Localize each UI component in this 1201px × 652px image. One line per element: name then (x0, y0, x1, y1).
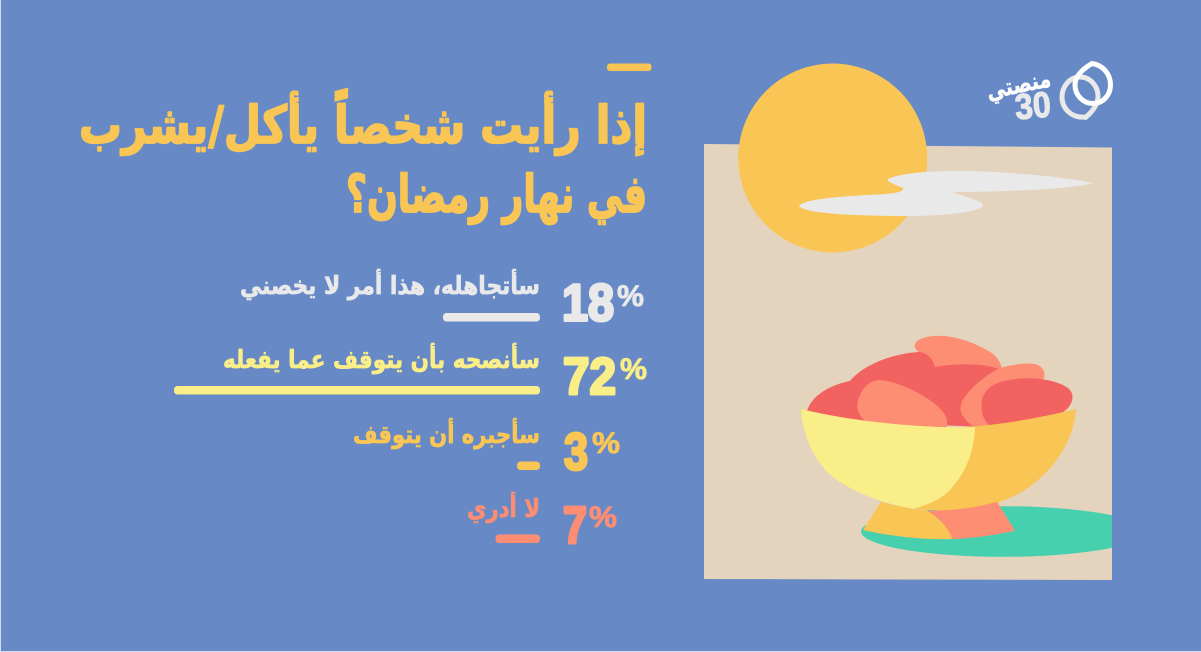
icon: bowl of dates (801, 336, 1076, 539)
bowl body (801, 409, 1076, 511)
icon: cloud (799, 171, 1093, 216)
bowl yellow highlight (801, 409, 975, 509)
icon: teal shadow under bowl (861, 506, 1112, 557)
title: إذا رأيت شخصاً يأكل/يشرب (79, 89, 647, 156)
back date (915, 336, 1002, 395)
icon: sun (738, 64, 927, 252)
row 2: advise to stop, 72%: سأنصحه بأن يتوقف عما يفعله (223, 343, 540, 375)
row 1: ignore it, 18%: 18 (562, 274, 614, 332)
bowl base salmon (926, 502, 1015, 539)
left date (857, 380, 947, 429)
row 3: force to stop, 3%: سأجبره أن يتوقف (353, 418, 540, 450)
row 4: do not know, 7%: لا أدري (467, 492, 540, 524)
right date back (960, 364, 1044, 428)
row 2: advise to stop, 72% (174, 343, 647, 406)
logo white ring (1075, 64, 1110, 104)
row 3: force to stop, 3% (353, 418, 620, 482)
row 2: advise to stop, 72%: 72 (563, 348, 616, 406)
illustration panel (704, 144, 1112, 580)
row 4: do not know, 7%: % (589, 501, 617, 534)
row 1: ignore it, 18% (240, 269, 644, 332)
logo wordmark: منصتي (984, 64, 1053, 105)
row 4: do not know, 7% (467, 492, 617, 555)
red dates (807, 352, 1010, 428)
bowl base orange (863, 502, 952, 539)
title accent bar (607, 64, 652, 71)
row 3: force to stop, 3%: % (592, 427, 620, 460)
right date front (981, 378, 1073, 428)
logo gray ring (1062, 77, 1098, 118)
row 2: advise to stop, 72%: % (620, 353, 647, 386)
title: في نهار رمضان؟ (346, 165, 647, 225)
row 3: force to stop, 3%: 3 (564, 424, 588, 482)
logo number: 30 (1013, 83, 1053, 127)
row 1: ignore it, 18%: سأتجاهله، هذا أمر لا يخصني (240, 269, 540, 301)
row 4: do not know, 7%: 7 (563, 497, 587, 555)
logo (984, 64, 1110, 127)
title (79, 89, 647, 225)
row 1: ignore it, 18%: % (617, 280, 644, 313)
